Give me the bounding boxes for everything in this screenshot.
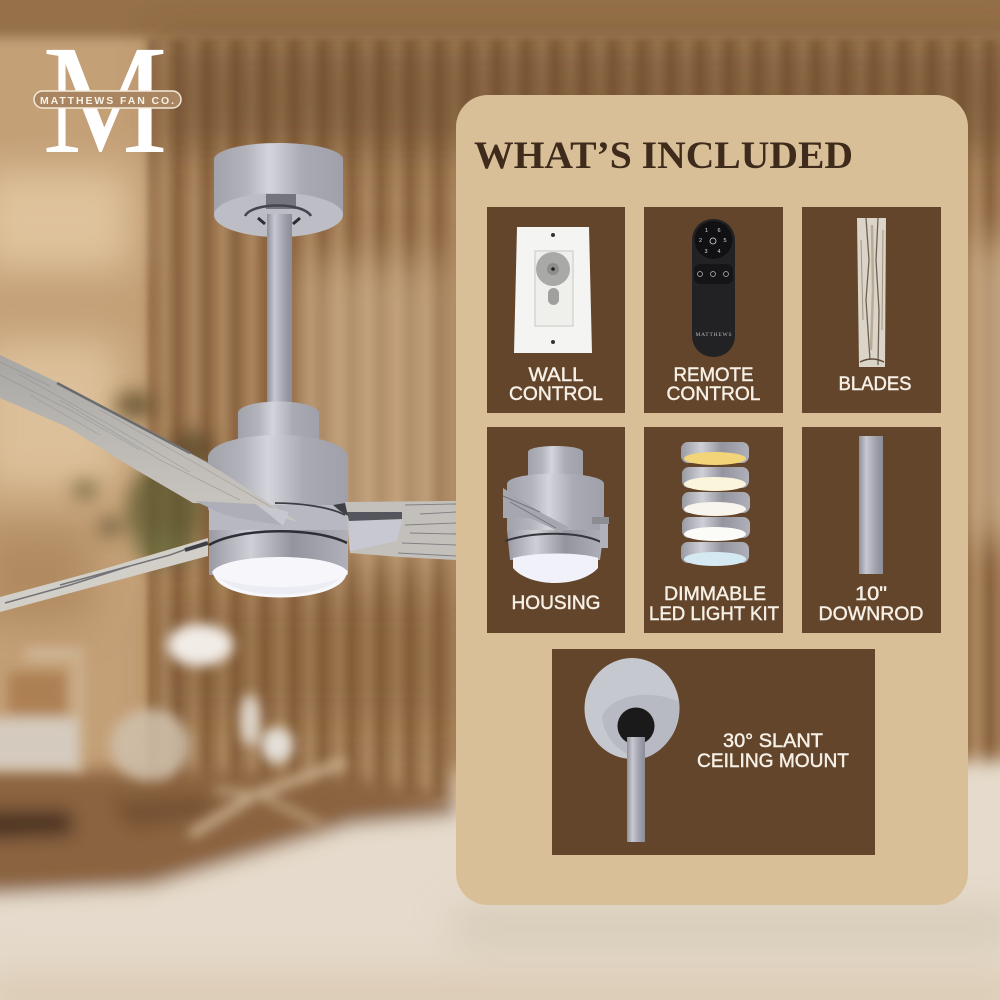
card: 10 inch downrod: 10" xyxy=(855,583,887,605)
card: dimmable LED light kit: DIMMABLE xyxy=(664,583,766,605)
card: wall control: WALL xyxy=(528,364,584,386)
icon: remote control: 3 xyxy=(704,249,708,255)
icon: remote control: MATTHEWS xyxy=(696,332,732,338)
blurred rug and floor xyxy=(0,760,1000,1000)
card: remote control xyxy=(644,207,783,413)
card: blades xyxy=(802,207,941,413)
blurred furniture xyxy=(0,624,345,835)
logo: Matthews Fan Co.: MATTHEWS FAN CO. xyxy=(40,95,174,107)
logo: Matthews Fan Co.: M xyxy=(42,13,168,186)
downrod xyxy=(267,215,292,405)
icon: blade xyxy=(857,218,886,367)
card: 30 degree slant ceiling mount: 30° SLANT xyxy=(723,730,823,752)
blurred plant xyxy=(73,391,214,564)
ceiling fan product xyxy=(0,143,456,612)
card: 10 inch downrod xyxy=(802,427,941,633)
icon: LED light kit xyxy=(681,442,750,566)
icon: remote control: 4 xyxy=(717,249,721,255)
icon: remote control: 5 xyxy=(723,238,727,244)
icon: remote control: 6 xyxy=(717,228,721,234)
icon: slant ceiling mount xyxy=(584,658,680,842)
blade bracket xyxy=(349,520,402,551)
icon: downrod xyxy=(859,436,883,574)
canopy and downrod xyxy=(214,143,343,405)
card: housing xyxy=(487,427,625,633)
card: 30 degree slant ceiling mount: CEILING MOUNT xyxy=(697,750,849,772)
card: remote control: REMOTE xyxy=(674,364,754,386)
fan blade: right xyxy=(333,501,456,560)
LED light xyxy=(212,557,348,598)
icon: wall control xyxy=(514,227,592,353)
fan blade: upper left xyxy=(0,355,298,526)
card: wall control xyxy=(487,207,625,413)
card: 30 degree slant ceiling mount xyxy=(552,649,875,855)
card: dimmable LED light kit: LED LIGHT KIT xyxy=(649,603,779,625)
title: WHAT’S INCLUDED xyxy=(474,134,853,177)
ceiling canopy xyxy=(214,143,343,238)
icon: remote control: 2 xyxy=(699,238,702,244)
card: dimmable LED light kit xyxy=(644,427,783,633)
icon: remote control xyxy=(692,219,735,357)
panel: what's included xyxy=(456,95,968,905)
card: housing: HOUSING xyxy=(512,592,600,614)
card: remote control: CONTROL xyxy=(666,383,761,405)
card: wall control: CONTROL xyxy=(509,383,603,405)
icon: housing xyxy=(503,446,609,583)
motor housing xyxy=(208,402,348,598)
blade bracket xyxy=(195,501,285,526)
fan blade: lower left xyxy=(0,538,208,612)
card: blades: BLADES xyxy=(838,373,912,395)
icon: remote control: 1 xyxy=(705,228,708,234)
card: 10 inch downrod: DOWNROD xyxy=(818,603,924,625)
